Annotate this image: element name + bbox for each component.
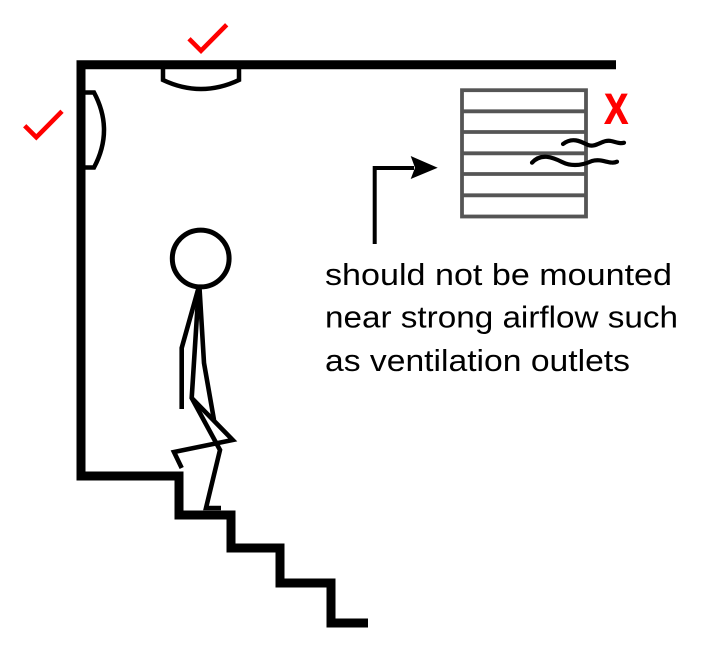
icon: ceiling mounted sensor [163,69,239,89]
wall, ceiling and stairs outline [81,65,616,623]
text block: mounting note: near strong airflow such [325,300,678,334]
icon: red X mark: X [604,86,628,134]
icon: stick figure climbing stairs [172,230,233,508]
text block: mounting note: as ventilation outlets [325,343,630,378]
icon: wall mounted sensor [85,92,104,168]
icon: airflow lines [532,140,624,165]
icon: check mark for wall position [25,111,62,137]
text block: mounting note [325,257,678,378]
icon: ventilation outlet [462,90,586,216]
icon: check mark for ceiling position [189,25,227,51]
arrow pointing to the ventilation outlet [375,156,438,244]
text block: mounting note: should not be mounted [325,257,672,292]
